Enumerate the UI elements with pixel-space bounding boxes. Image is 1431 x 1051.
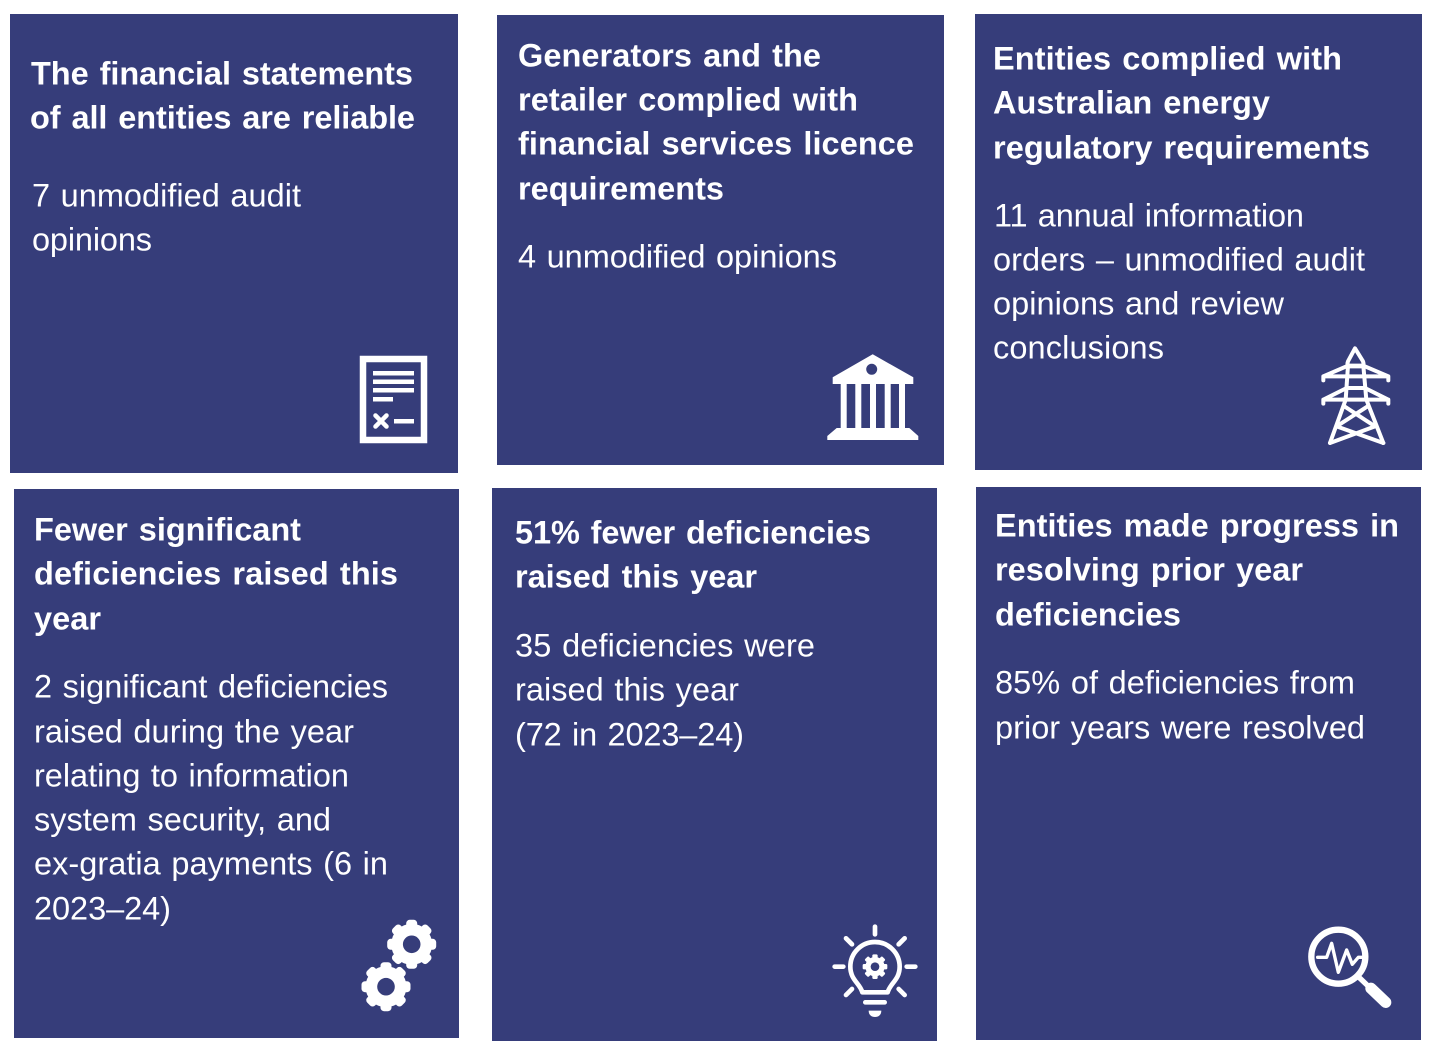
text: significant deficiencies detail: 2023–24) [34, 890, 171, 926]
text: deficiencies count [515, 628, 815, 752]
heading: progress on prior year deficiencies [995, 508, 1399, 632]
text: annual information orders: opinions and review [993, 286, 1285, 322]
panel: financial services licence [497, 15, 944, 465]
heading: fewer significant deficiencies: year [34, 600, 101, 636]
heading: licence requirements: Generators and the [518, 38, 821, 74]
heading: licence requirements: requirements [518, 170, 724, 206]
icon: magnifier with pulse [1311, 930, 1386, 1002]
heading: fewer significant deficiencies: deficiencies raised this [34, 556, 398, 592]
text: deficiencies resolved [995, 664, 1365, 746]
icon: document [363, 359, 424, 440]
panel: significant deficiencies [14, 489, 459, 1038]
heading: energy requirements: Entities complied with [993, 40, 1342, 76]
text: deficiencies count: 35 deficiencies were [515, 628, 815, 664]
heading: fewer significant deficiencies [34, 512, 398, 636]
heading: financial statements: of all entities are reliable [30, 100, 415, 136]
icon: transmission tower [1323, 348, 1388, 443]
text: deficiencies resolved: 85% of deficiencies from [995, 664, 1355, 700]
heading: licence requirements [518, 38, 914, 206]
heading: energy requirements: regulatory requirements [993, 130, 1370, 166]
text: annual information orders: orders – unmodified audit [993, 242, 1365, 278]
icon: light bulb with gear [835, 927, 915, 1017]
panel: energy regulatory requirements [975, 14, 1422, 470]
text: annual information orders: conclusions [993, 330, 1164, 366]
text: significant deficiencies detail: ex-gratia payments (6 in [34, 846, 388, 882]
text: significant deficiencies detail: 2 significant deficiencies [34, 668, 388, 704]
heading: energy requirements: Australian energy [993, 84, 1270, 120]
panel: reliable financial statements [10, 14, 458, 473]
heading: licence requirements: retailer complied with [518, 82, 858, 118]
text: significant deficiencies detail: system security, and [34, 802, 331, 838]
heading: fewer significant deficiencies: Fewer significant [34, 512, 301, 548]
panel: fewer deficiencies [492, 488, 937, 1041]
text: audit opinions: 7 unmodified audit [32, 178, 301, 214]
text: deficiencies count: raised this year [515, 672, 739, 708]
heading: financial statements: The financial statements [31, 56, 413, 92]
text: annual information orders [993, 198, 1365, 366]
heading: progress on prior year deficiencies: resolving prior year [995, 552, 1303, 588]
text: deficiencies count: (72 in 2023–24) [515, 716, 744, 752]
heading: progress on prior year deficiencies: deficiencies [995, 596, 1181, 632]
heading: licence requirements: financial services licence [518, 126, 914, 162]
heading: 51% fewer deficiencies [515, 514, 871, 594]
text: audit opinions [32, 178, 301, 258]
heading: energy requirements [993, 40, 1370, 166]
heading: 51% fewer deficiencies: raised this year [515, 558, 757, 594]
panel: prior year deficiencies [976, 487, 1421, 1040]
text: unmodified opinions: 4 unmodified opinions [518, 238, 837, 274]
text: significant deficiencies detail [34, 668, 388, 926]
text: significant deficiencies detail: relating to information [34, 758, 349, 794]
heading: 51% fewer deficiencies: 51% fewer deficiencies [515, 514, 871, 550]
text: annual information orders: 11 annual information [994, 198, 1304, 234]
icon: gears [362, 920, 436, 1011]
heading: progress on prior year deficiencies: Entities made progress in [995, 508, 1399, 544]
text: significant deficiencies detail: raised during the year [34, 714, 354, 750]
heading: financial statements [30, 56, 415, 136]
text: audit opinions: opinions [32, 222, 152, 258]
icon: institution building [827, 354, 918, 440]
text: deficiencies resolved: prior years were resolved [995, 710, 1365, 746]
